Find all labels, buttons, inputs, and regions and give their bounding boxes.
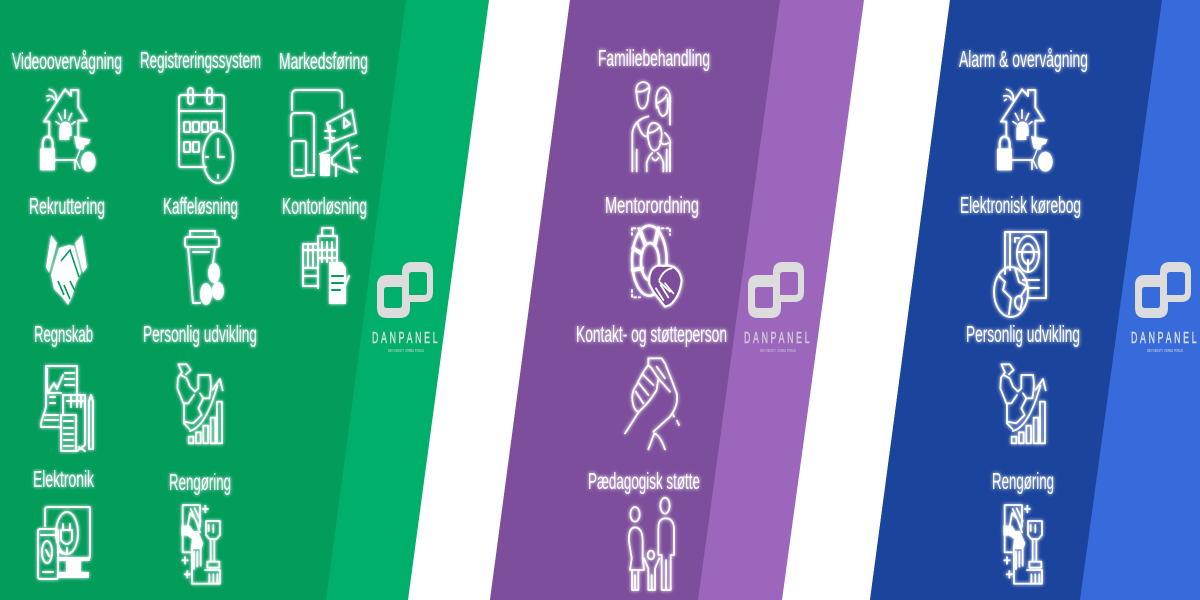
icon: alarm house [997, 89, 1053, 172]
icon: personal development puzzle [1000, 364, 1046, 443]
icon: family [632, 82, 670, 171]
icon: cleaning [181, 505, 220, 584]
purple dark background [490, 0, 780, 600]
logo: Danpanel green: DIN VÆKST I VORES FOKUS [388, 348, 424, 353]
blue dark background [870, 0, 1162, 600]
label: Regnskab: Regnskab [34, 321, 93, 347]
icon: coffee cup [185, 231, 224, 305]
icon: electronic logbook [994, 232, 1046, 317]
label: Kontorløsning: Kontorløsning [282, 193, 367, 219]
label: Kaffeløsning: Kaffeløsning [163, 193, 238, 219]
label: Registreringssystem: Registreringssystem [140, 47, 261, 73]
green dark background [0, 0, 406, 600]
icon: clasped hands [625, 358, 679, 449]
icon: lifebuoy with handshake [632, 226, 682, 307]
icon: personal development puzzle [177, 364, 223, 443]
label: Alarm & overvågning: Alarm & overvågning [959, 46, 1088, 72]
icon: calendar with clock [179, 88, 233, 183]
icon: office buildings [303, 228, 349, 304]
label: Markedsføring: Markedsføring [279, 48, 368, 74]
green panel content [12, 47, 368, 584]
icon: handshake [46, 235, 87, 305]
blue panel content [959, 46, 1088, 584]
logo: Danpanel green [372, 262, 440, 353]
icon: tablet and megaphone [291, 90, 360, 176]
label: Familiebehandling: Familiebehandling [598, 45, 710, 71]
label: Pædagogisk støtte: Pædagogisk støtte [588, 468, 700, 494]
icon: accounting [41, 366, 93, 451]
purple light background [490, 0, 864, 600]
icon: electronics [38, 507, 90, 579]
label: Rengøring: Rengøring [992, 468, 1054, 494]
icon: parents and child [629, 498, 674, 590]
label: Personlig udvikling: Personlig udvikling [966, 321, 1080, 347]
logo: Danpanel purple: DANPANEL [744, 328, 812, 347]
icon: cleaning [1003, 505, 1042, 584]
logo: Danpanel purple: DIN VÆKST I VORES FOKUS [760, 348, 796, 353]
logo: Danpanel blue: DANPANEL [1131, 328, 1199, 347]
label: Videoovervågning: Videoovervågning [12, 48, 122, 74]
panel: green services [0, 0, 489, 600]
label: Elektronisk kørebog: Elektronisk kørebog [960, 192, 1081, 218]
label: Mentorordning: Mentorordning [605, 192, 699, 218]
icon: alarm house [40, 89, 96, 172]
label: Kontakt- og støtteperson: Kontakt- og støtteperson [576, 321, 727, 347]
green light background [0, 0, 489, 600]
label: Elektronik: Elektronik [33, 466, 94, 492]
purple panel content [576, 45, 727, 590]
panel: purple services [490, 0, 864, 600]
logo: Danpanel green: DANPANEL [372, 328, 440, 347]
label: Personlig udvikling: Personlig udvikling [143, 321, 257, 347]
label: Rengøring: Rengøring [169, 469, 231, 495]
logo: Danpanel blue [1131, 262, 1199, 353]
blue light background [870, 0, 1200, 600]
label: Rekruttering: Rekruttering [29, 193, 105, 219]
logo: Danpanel purple [744, 262, 812, 353]
panel: blue services [870, 0, 1200, 600]
